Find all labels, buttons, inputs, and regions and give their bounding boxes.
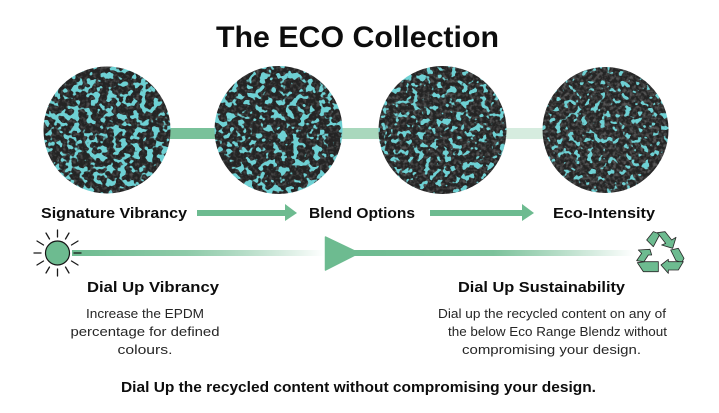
rubber granule swatch: blend high xyxy=(214,66,343,194)
text block: sustainability description: Dial up the recycled content on any of xyxy=(438,307,667,321)
text block: sustainability description: the below Eco Range Blendz without xyxy=(448,325,668,339)
icon: recycling symbol xyxy=(637,232,684,273)
text block: vibrancy description: percentage for defined xyxy=(70,325,220,339)
text block: vibrancy description xyxy=(70,307,220,357)
arrow: signature to blend xyxy=(197,204,297,221)
centre triangle marker xyxy=(326,237,359,270)
gradient line: vibrancy xyxy=(72,250,324,256)
connector bar: blend 1 to blend 2 xyxy=(342,128,380,139)
text block: sustainability description: compromising your design. xyxy=(462,343,641,357)
title: The ECO Collection xyxy=(216,21,499,54)
label: blend options: Blend Options xyxy=(309,206,415,222)
text block: vibrancy description: colours. xyxy=(118,343,172,357)
gradient line: sustainability xyxy=(352,250,634,256)
arrow: blend to eco xyxy=(430,204,534,221)
rubber granule swatch: signature vibrancy xyxy=(43,66,171,194)
icon: sun xyxy=(34,230,81,276)
rubber granule swatch: blend low xyxy=(378,66,507,194)
connector bar: vibrancy to blend 1 xyxy=(170,128,216,139)
label: signature vibrancy: Signature Vibrancy xyxy=(41,206,187,222)
label: eco-intensity: Eco-Intensity xyxy=(553,206,655,222)
text block: sustainability description xyxy=(438,307,668,357)
connector bar: blend 2 to eco-intensity xyxy=(506,128,544,139)
heading: dial up sustainability: Dial Up Sustainability xyxy=(458,280,625,296)
closing statement: Dial Up the recycled content without compromising your design. xyxy=(121,380,596,396)
rubber granule swatch: eco-intensity xyxy=(542,67,669,193)
text block: vibrancy description: Increase the EPDM xyxy=(86,307,204,321)
heading: dial up vibrancy: Dial Up Vibrancy xyxy=(87,280,219,296)
